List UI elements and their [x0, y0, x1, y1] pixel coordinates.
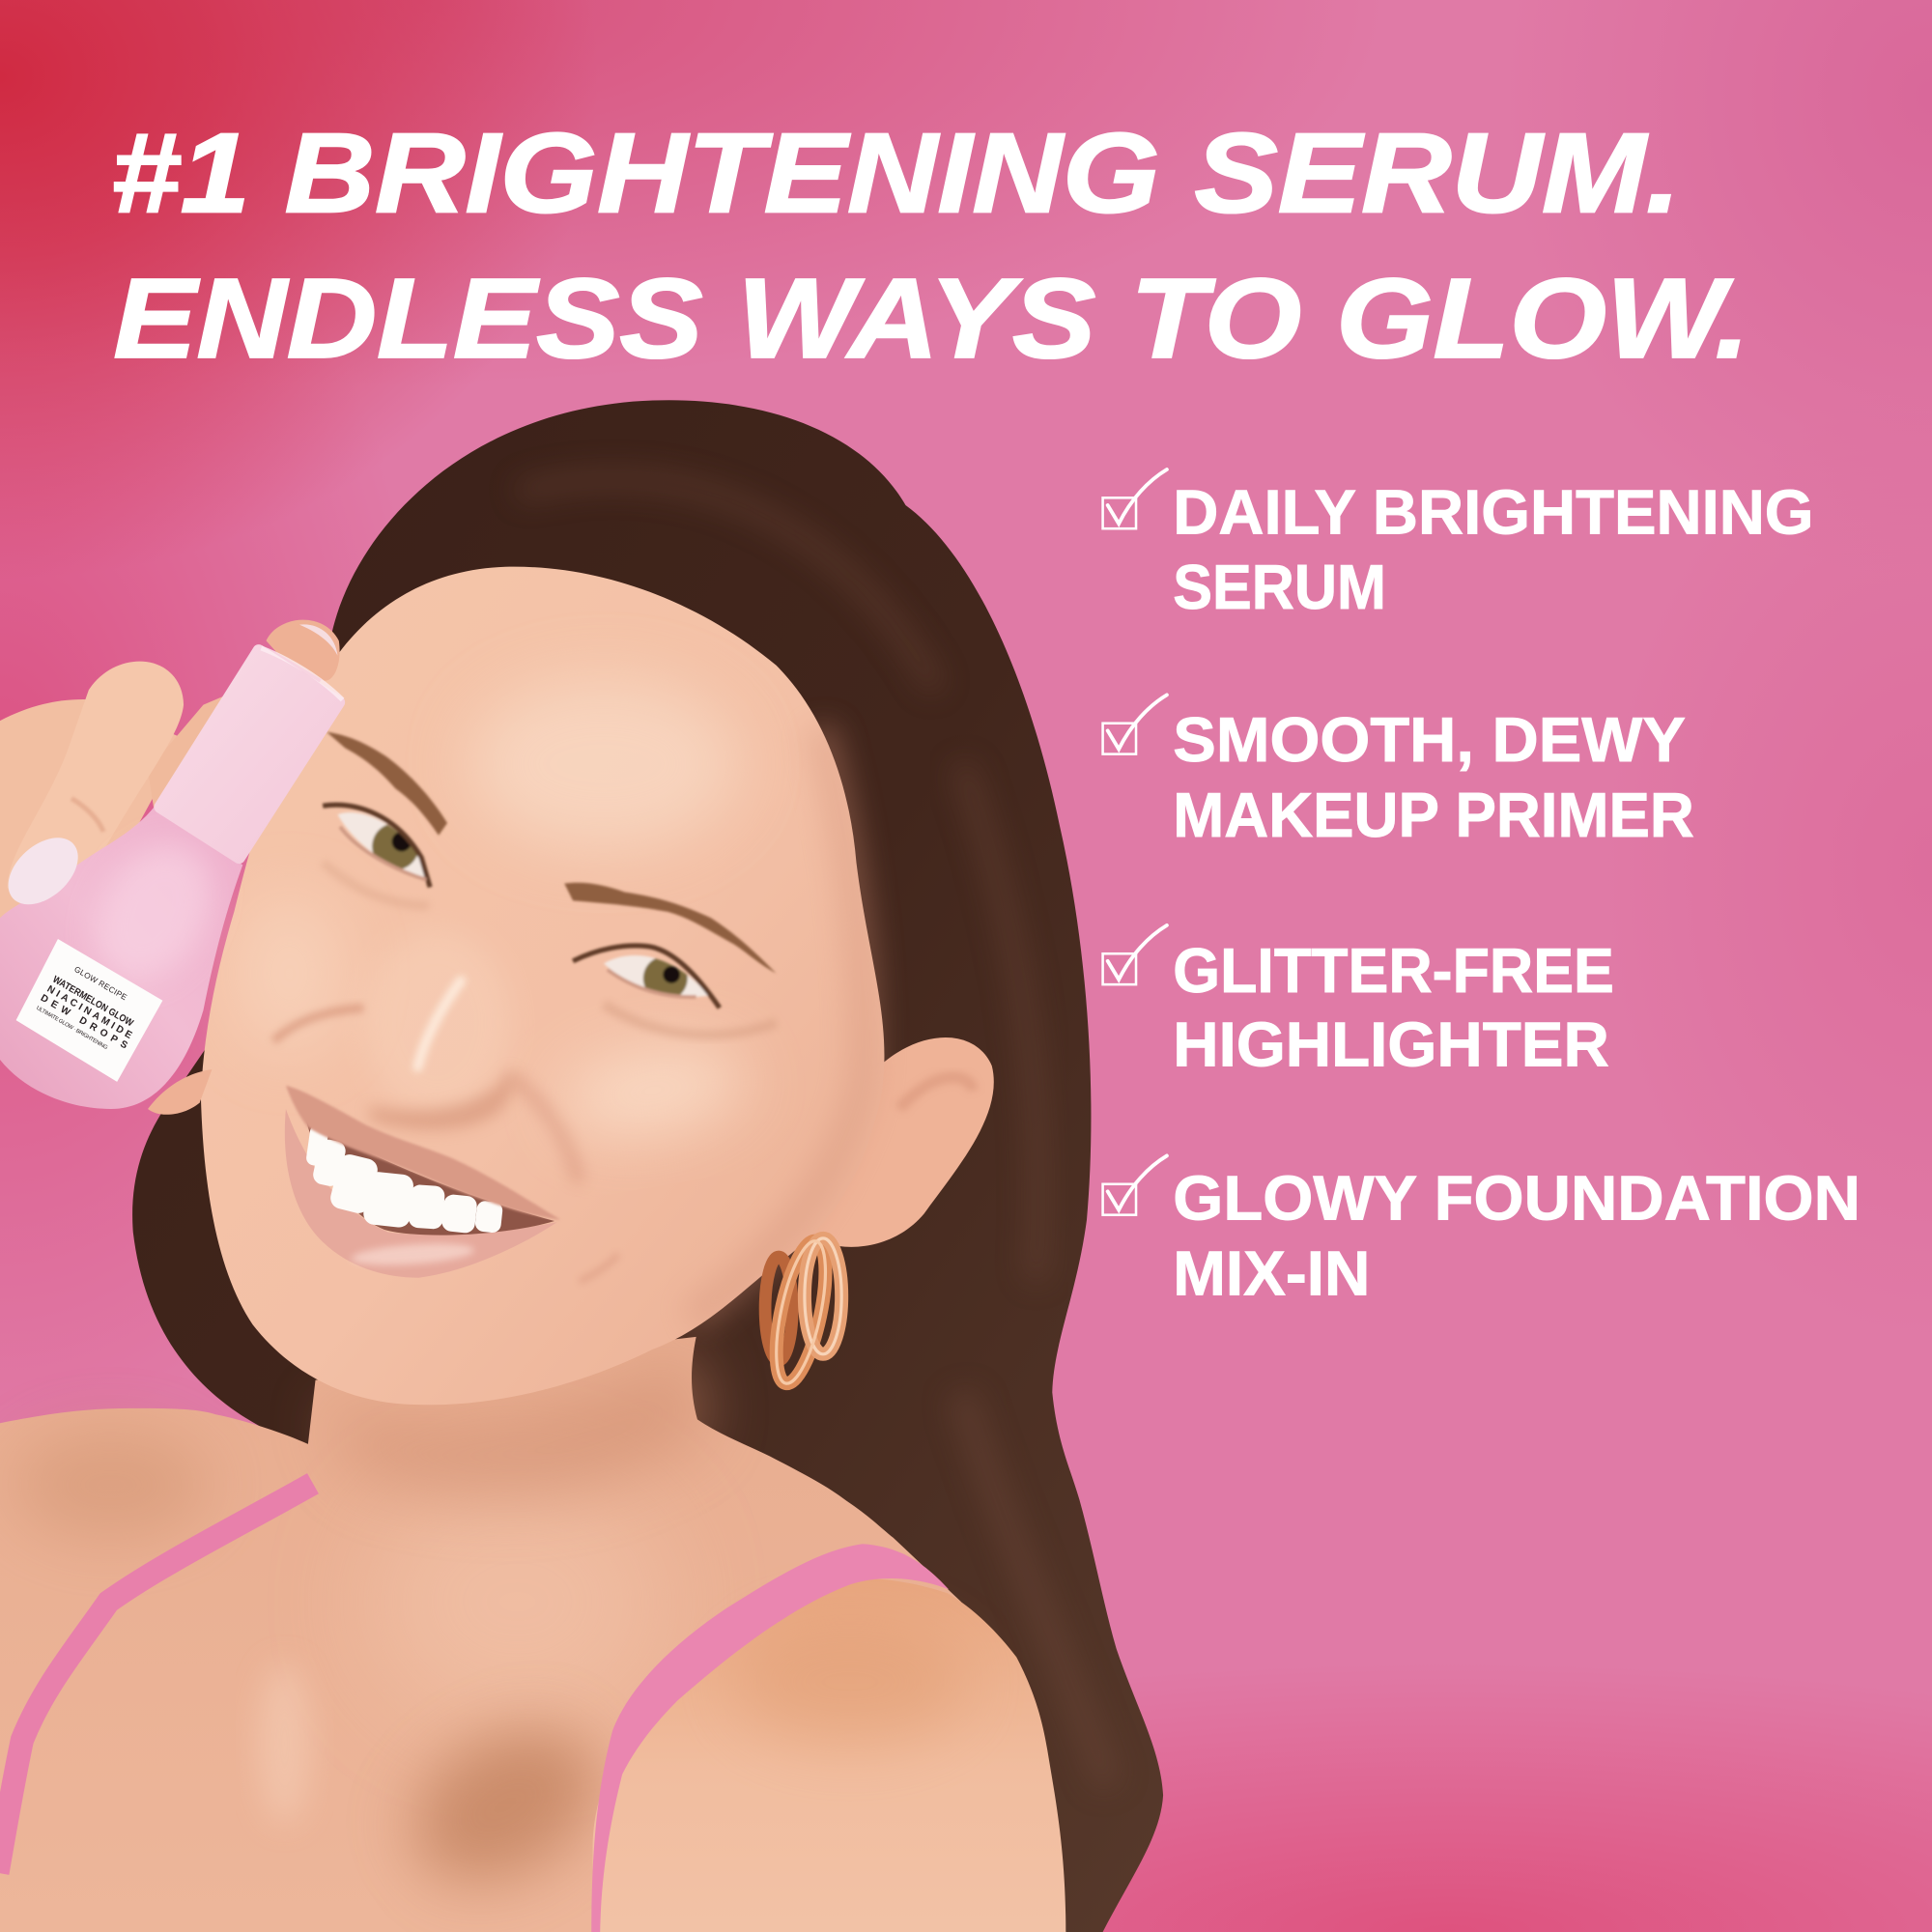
item: makeup primer: [1103, 695, 1694, 850]
headline: #1 BRIGHTENING SERUM.: [111, 109, 1681, 236]
cheek dimple: [579, 1254, 618, 1282]
nose shading: [370, 1068, 513, 1130]
lip gloss: [351, 1240, 475, 1268]
chest shadow: [386, 1697, 624, 1913]
left under-eye shading: [323, 863, 429, 906]
right smile crease: [513, 1077, 579, 1182]
item: daily brightening serum: SERUM: [1173, 552, 1386, 622]
item: foundation mix-in: [1103, 1155, 1861, 1309]
item: daily brightening serum: DAILY BRIGHTENING: [1173, 476, 1814, 547]
hair behind head: [132, 400, 1163, 1932]
ear: [801, 1037, 994, 1247]
right eyebrow: [564, 883, 777, 974]
arm: [593, 1578, 1065, 1932]
headline: [111, 109, 1749, 382]
label text: WATERMELON GLOW: [50, 975, 135, 1030]
thumb: [267, 620, 340, 681]
bottle sheen: [73, 824, 235, 1000]
under-eye shading: [604, 1005, 777, 1035]
mouth interior: [305, 1119, 554, 1236]
checkbox icon: [1103, 1155, 1167, 1215]
left cheek highlight: [234, 894, 345, 1054]
left eyebrow: [327, 732, 447, 836]
mouth: [285, 1086, 560, 1278]
nose bright area: [363, 930, 511, 1115]
hand holding bottle: [0, 620, 343, 1115]
upper lip: [286, 1086, 560, 1220]
left eye: [323, 805, 430, 887]
left strap: [0, 1484, 313, 1873]
index finger: [8, 662, 184, 910]
item: foundation mix-in: MIX-IN: [1173, 1238, 1370, 1309]
forehead highlight: [469, 678, 739, 850]
label text: GLOW RECIPE: [72, 964, 129, 1002]
nail: [0, 825, 91, 918]
item: highlighter: GLITTER-FREE: [1173, 935, 1614, 1006]
left shoulder shade: [13, 1430, 210, 1540]
cap top highlight: [261, 648, 343, 699]
palm: [0, 699, 185, 943]
smile crease: [273, 1008, 363, 1041]
label text: NIACINAMIDE: [45, 984, 133, 1041]
item: daily brightening serum: [1103, 469, 1814, 622]
hair highlights: [518, 479, 1109, 1786]
label text: [34, 956, 151, 1060]
label text: DEW DROPS: [39, 993, 129, 1052]
checkbox icon: [1103, 469, 1167, 528]
right strap: [591, 1544, 949, 1932]
headline: ENDLESS WAYS TO GLOW.: [113, 255, 1749, 382]
label text: ULTIMATE GLOW · BRIGHTENING: [35, 1006, 109, 1051]
teeth: [305, 1124, 503, 1234]
earring: [765, 1237, 841, 1387]
lower finger: [148, 1069, 212, 1115]
finger crease: [71, 799, 103, 832]
right eye: [573, 946, 720, 1008]
bottle body: [0, 807, 242, 1109]
neck light: [370, 1479, 666, 1725]
finger behind bottle: [148, 684, 252, 850]
thumbnail: [299, 624, 337, 656]
face: [201, 567, 884, 1405]
under chin shadow: [323, 1350, 708, 1497]
checkbox icon: [1103, 695, 1167, 754]
checklist: [1103, 469, 1861, 1309]
shoulders and neck: [0, 1337, 1065, 1932]
person: [0, 400, 1163, 1932]
item: highlighter: HIGHLIGHTER: [1173, 1009, 1609, 1079]
collarbone light: [258, 1663, 312, 1824]
item: makeup primer: MAKEUP PRIMER: [1173, 780, 1694, 850]
face edge shadow: [690, 727, 864, 1319]
checkbox icon: [1103, 925, 1167, 984]
cheek highlight: [554, 1032, 752, 1149]
inner ear shade: [899, 1077, 974, 1109]
product label: [16, 939, 162, 1082]
item: highlighter: [1103, 925, 1614, 1079]
nose highlight: [417, 980, 461, 1067]
item: makeup primer: SMOOTH, DEWY: [1173, 704, 1686, 775]
bottle cap: [160, 650, 339, 858]
item: foundation mix-in: GLOWY FOUNDATION: [1173, 1163, 1861, 1234]
arm tan area: [733, 1620, 967, 1744]
lower lip: [285, 1109, 557, 1278]
